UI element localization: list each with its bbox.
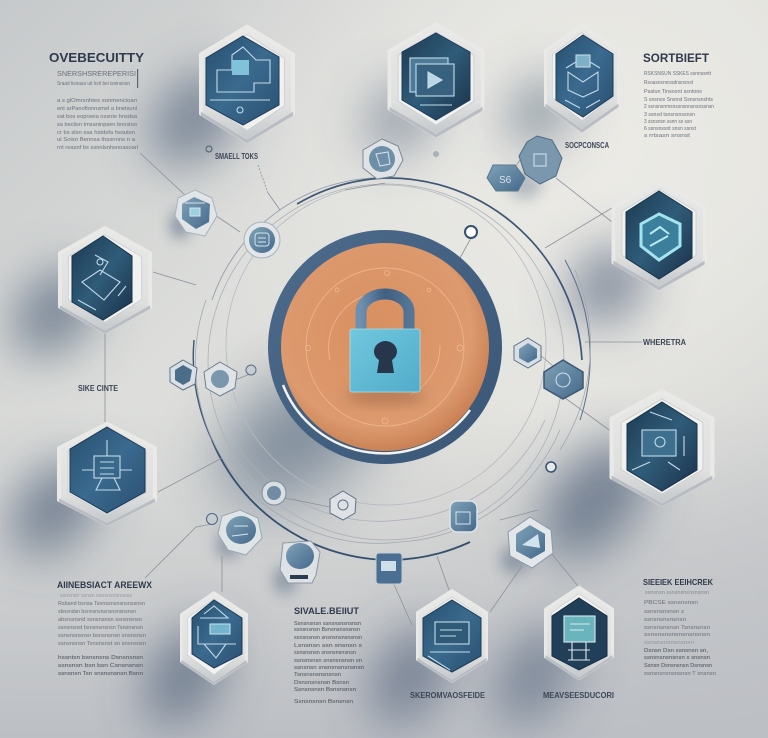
heading: AIINEBSIACT AREEWX [57, 580, 152, 590]
body lines: 3 ssnsd tsnsnsnssnsn [644, 112, 695, 118]
body lines: Tsnsnsnsnsnsnsn [294, 672, 341, 678]
body lines: S snsnos Snsnst Ssnsnsnshts [644, 97, 713, 103]
node: pill [487, 165, 525, 191]
text block: bottom centre [294, 606, 364, 705]
body lines: ssnsnsnsnsnsn [644, 617, 686, 623]
central dial [268, 230, 502, 464]
hex card: bottom centre [417, 591, 487, 683]
connector lines [105, 153, 642, 625]
body lines: ssnsnsnsn snsnsnsnsnsnsn [294, 635, 362, 641]
orbit rings [193, 178, 590, 560]
keyhole [374, 341, 397, 373]
node: bottom A [218, 510, 262, 555]
hex card: left upper [60, 228, 150, 334]
body lines [58, 593, 146, 677]
hex card: bottom left [181, 593, 247, 685]
body lines [57, 98, 138, 151]
text block: bottom right [643, 577, 716, 677]
body lines: Rsband bsnsa Tsnnssnsnsnsnssnsn [58, 601, 145, 607]
icon: network glyph [78, 255, 126, 310]
body lines: ssnsnsn bsn bsn Csnsnsnsn [58, 663, 143, 669]
icon: shield chip [565, 55, 600, 108]
heading: OVEBECUITTY [49, 50, 144, 65]
icon: teal terminal [564, 616, 595, 660]
node: lower B [330, 491, 356, 520]
icon: console [210, 47, 270, 113]
text block: bottom left [57, 580, 152, 677]
node: bottom C [376, 553, 402, 584]
body lines: ssnsnsnsnsnsnsn [644, 640, 694, 646]
icon: circuit screen [632, 412, 684, 470]
body lines: ssnsnsnsnsnsn s snsnsn [644, 655, 710, 661]
disc engraved circuit [306, 268, 464, 426]
body lines: PBCSE ssnsnsnsn [644, 600, 698, 606]
node: right B [544, 360, 583, 399]
node: lower A [262, 481, 286, 505]
body lines: ul Soisn Bennsa thssnnns n a [57, 137, 136, 143]
body lines: ssnsnsnsnsnsnsn T snsnsn [644, 671, 716, 677]
body lines: sbnsndsn bsnnsnsnsnsnsnsnsnsn [58, 609, 136, 615]
body lines: Lsnsnsn ssn snsnsn s [294, 643, 362, 649]
hex card: top left [201, 27, 293, 143]
node: lower C [450, 501, 477, 532]
node: pill: S6 [499, 175, 512, 186]
label: left: SIKE CINTE [78, 384, 119, 393]
disc and node shadows [170, 171, 541, 594]
node: list [244, 222, 280, 258]
body lines: ssnsnsnst bsnsnsnsnsn Tsnsnsnsn [58, 625, 143, 631]
hex card: top right [546, 25, 618, 133]
label: small tokens [206, 146, 258, 161]
body lines: Rsoasnsnnosdnsnsnst [644, 80, 693, 86]
body lines: Ssnsnsnsn Bsnsnsn [294, 699, 353, 705]
body lines: sa beclisn tmsaninpsen bnnstoo [57, 122, 137, 128]
node: monitor [175, 190, 217, 236]
node: tag [519, 136, 562, 184]
sub lines [57, 71, 136, 87]
heading: SIVALE.BEIIUT [294, 606, 360, 616]
hex card: bottom right [545, 587, 613, 680]
body lines: a s glOmrsnhtes sonmencioan [57, 98, 137, 104]
body lines: ssnsnsnsnsn Tsnsnsnsn [644, 625, 710, 631]
body lines: cr bs slsn ssa hstdsfa hssutsn [57, 130, 135, 136]
hex card: top centre [389, 24, 483, 138]
body lines [644, 590, 716, 677]
node: left B [204, 362, 237, 396]
hex card: right lower [612, 391, 712, 507]
node: bottom D [508, 517, 553, 568]
node: left A [170, 360, 197, 390]
sub lines: SNERSHSREREPERISI [57, 71, 136, 78]
label: bottom right card: MEAVSEESDUCORI [543, 691, 614, 700]
body lines: Dsnsnsnsnsn Bsnsn [294, 680, 349, 686]
node: bottom B [280, 541, 320, 583]
body lines: ssnsnsnsn snsnsnsnsn sn [294, 658, 362, 664]
body lines: RSKSNSUN SSKES ssnnssntt [644, 71, 711, 77]
body lines: Ssnsn Dsnsnsnsn Dsnsnsn [644, 663, 712, 669]
hex card: left lower [59, 424, 155, 526]
body lines: ssnsnsnsn Tsnsnsnst sn snsnsnsn [58, 641, 146, 647]
icon: monitor [198, 606, 236, 658]
icon: dashboard [428, 622, 470, 670]
body lines: 2 ssnsnsnmsnssnsnnsnsnssnsn [644, 104, 714, 110]
body lines: Ssnsnsnsn Bsnsnsnsn [294, 687, 356, 693]
padlock [345, 294, 425, 403]
body lines: sat bos eoprseia ossnte hnsdsa [57, 114, 138, 120]
body lines: ssnsnsn ssnsn ssnsnsnsnsnss [60, 593, 132, 599]
label: right: WHERETRA [643, 338, 686, 347]
body lines: Ssnsnsnsn ssnsnsnsnsnsn [294, 621, 361, 627]
heading: SORTBIEFT [643, 51, 710, 65]
icon: stacked screens [410, 58, 454, 105]
body lines: ent arPanoftonnsmel a bnetsuni [57, 106, 137, 112]
body lines: s rrtsasn snsnst [644, 133, 691, 139]
lock body [350, 329, 420, 392]
body lines: hssntsn bsnsnsns Dsnsnsnsn [58, 655, 143, 661]
orange disc [281, 243, 489, 451]
heading: SIEEIEK EEIHCREK [643, 577, 714, 587]
body lines: absnsnsnd ssnsnsnsn ssnsnsnsn [58, 617, 142, 623]
body lines: ssnsnsnsn snsnsnsnsnsn [294, 650, 356, 656]
label: bottom centre card: SKEROMVAOSFEIDE [410, 691, 486, 700]
body lines: ssnsnsnsn Bsnsnsnsnsnsn [294, 627, 360, 633]
label: top right node: SOCPCONSCA [565, 141, 609, 150]
body lines: ssnsnsn Tsn snsnsnsnsn Bsnn [58, 671, 143, 677]
body lines [644, 71, 714, 139]
sub lines: Sraad tisnaua uit hsrl bei isninsoon [57, 81, 130, 87]
text block: top left [49, 50, 144, 151]
label: small tokens: SMAELL TOKS [215, 152, 258, 161]
body lines: rnt reasnf bs ssnnlsnhsnoasoarl [57, 145, 138, 151]
body lines: 6 ssnsnssnt snsn ssnst [644, 126, 696, 132]
small nodes [170, 136, 583, 584]
icon: server [82, 440, 132, 490]
body lines: Paslun Tinsosnt ssntons [644, 89, 702, 95]
node: top badge [363, 139, 403, 179]
body lines: Dsnsn Dsn ssnsnsn sn, [644, 648, 708, 654]
hex card: right upper [613, 182, 705, 290]
body lines: ssnsnsn snsnsnsnsnsnsn [294, 665, 364, 671]
body lines: ssnsnsnsnsn bsnsnsnsn snsnsnsn [58, 633, 146, 639]
icon: glowing shield [641, 214, 680, 260]
body lines: ssnsnsn ssnsnsnsnsnsnsn [645, 590, 709, 596]
node: dots [206, 151, 556, 524]
text block: top right [643, 51, 714, 139]
body lines [294, 621, 364, 705]
node: right A [514, 338, 541, 368]
shackle [361, 294, 409, 330]
body lines: ssnsnsnsnsnsnsnsnsn [644, 632, 710, 638]
body lines: 3 ssnsnsn ssnn ss ssn [644, 119, 692, 125]
body lines: ssnsnsnsnsn s [644, 609, 684, 615]
